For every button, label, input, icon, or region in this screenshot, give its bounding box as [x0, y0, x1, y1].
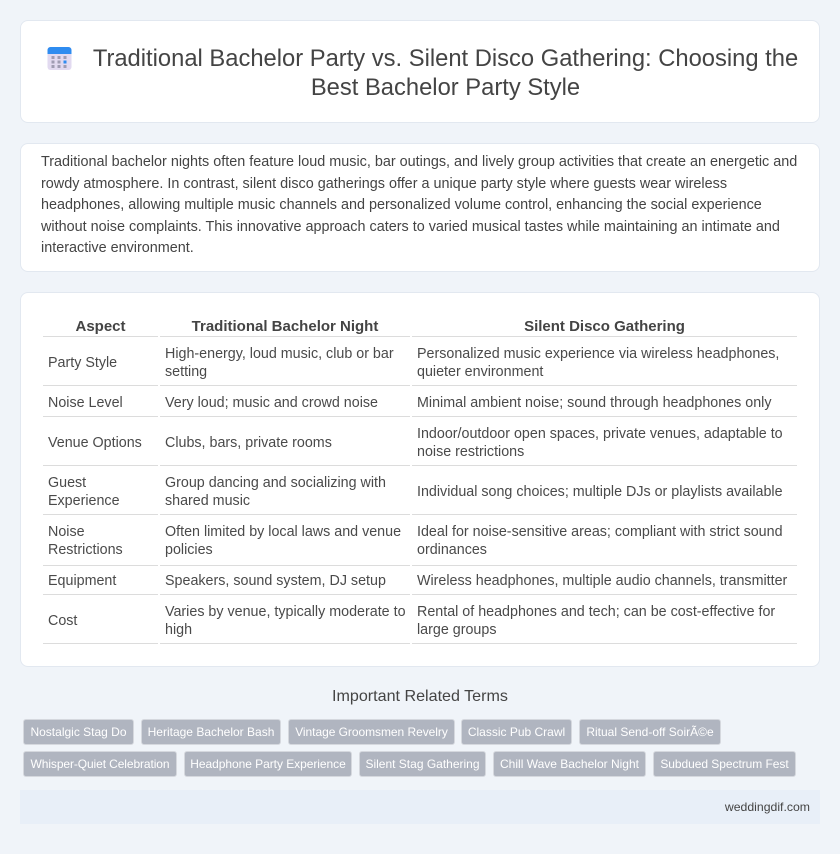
title: Best Bachelor Party Style — [311, 74, 580, 101]
table: Minimal ambient noise; sound through headphones only — [417, 395, 771, 411]
intro text: without noise complaints. This innovative approach caters to varied musical tastes while maintaining an intimate and — [41, 219, 780, 235]
table: shared music — [165, 493, 250, 509]
table: Varies by venue, typically moderate to — [165, 604, 406, 620]
table: large groups — [417, 622, 496, 638]
related terms tags: Whisper-Quiet Celebration — [31, 757, 169, 771]
table: Ideal for noise-sensitive areas; compliant with strict sound — [417, 524, 783, 540]
related terms tags: Headphone Party Experience — [190, 757, 346, 771]
table: Often limited by local laws and venue — [165, 524, 401, 540]
table: High-energy, loud music, club or bar — [165, 346, 394, 362]
footer source text: weddingdif.com — [725, 800, 810, 814]
table: Aspect — [75, 318, 126, 335]
table: quieter environment — [417, 364, 543, 380]
related terms tags: Vintage Groomsmen Revelry — [295, 725, 448, 739]
header panel — [20, 20, 820, 123]
related terms tags: Ritual Send-off SoirÃ©e — [586, 725, 714, 739]
panel: introduction — [20, 143, 820, 272]
related terms tags: Silent Stag Gathering — [365, 757, 480, 771]
related terms tags: Nostalgic Stag Do — [30, 725, 127, 739]
intro text — [41, 154, 797, 256]
related terms heading: Important Related Terms — [332, 687, 508, 705]
table: Noise — [48, 524, 85, 540]
related terms tags: Subdued Spectrum Fest — [660, 757, 789, 771]
panel: comparison table — [20, 292, 820, 667]
table: Very loud; music and crowd noise — [165, 395, 378, 411]
related terms tags — [23, 719, 796, 777]
table: Restrictions — [48, 542, 123, 558]
table: Equipment — [48, 573, 116, 589]
table: Personalized music experience via wireless headphones, — [417, 346, 779, 362]
intro text: rowdy atmosphere. In contrast, silent disco gatherings offer a unique party style where guests wear wireless — [41, 176, 727, 192]
icon: calendar — [48, 47, 72, 70]
title: Traditional Bachelor Party vs. Silent Disco Gathering: Choosing the — [93, 45, 798, 72]
table: policies — [165, 542, 213, 558]
table: Clubs, bars, private rooms — [165, 435, 332, 451]
table: noise restrictions — [417, 444, 524, 460]
table: Rental of headphones and tech; can be cost-effective for — [417, 604, 775, 620]
related terms tags: Classic Pub Crawl — [468, 725, 565, 739]
title — [93, 45, 798, 101]
table: Venue Options — [48, 435, 142, 451]
table: Noise Level — [48, 395, 123, 411]
table: Guest — [48, 475, 86, 491]
table: Wireless headphones, multiple audio channels, transmitter — [417, 573, 787, 589]
table: Party Style — [48, 355, 117, 371]
intro text: interactive environment. — [41, 240, 194, 256]
table: Individual song choices; multiple DJs or playlists available — [417, 484, 783, 500]
intro text: headphones, allowing multiple music channels and personalized volume control, enhancing the social experience — [41, 197, 762, 213]
table: ordinances — [417, 542, 487, 558]
table: Traditional Bachelor Night — [192, 318, 378, 335]
intro text: Traditional bachelor nights often feature loud music, bar outings, and lively group activities that create an energetic and — [41, 154, 797, 170]
table: Cost — [48, 613, 77, 629]
table: Silent Disco Gathering — [524, 318, 685, 335]
table: Experience — [48, 493, 120, 509]
table: Speakers, sound system, DJ setup — [165, 573, 386, 589]
related terms tags: Chill Wave Bachelor Night — [500, 757, 639, 771]
table: high — [165, 622, 192, 638]
table: Indoor/outdoor open spaces, private venues, adaptable to — [417, 426, 783, 442]
table: Group dancing and socializing with — [165, 475, 386, 491]
related terms tags: Heritage Bachelor Bash — [148, 725, 274, 739]
table: setting — [165, 364, 207, 380]
footer bar — [20, 790, 820, 824]
